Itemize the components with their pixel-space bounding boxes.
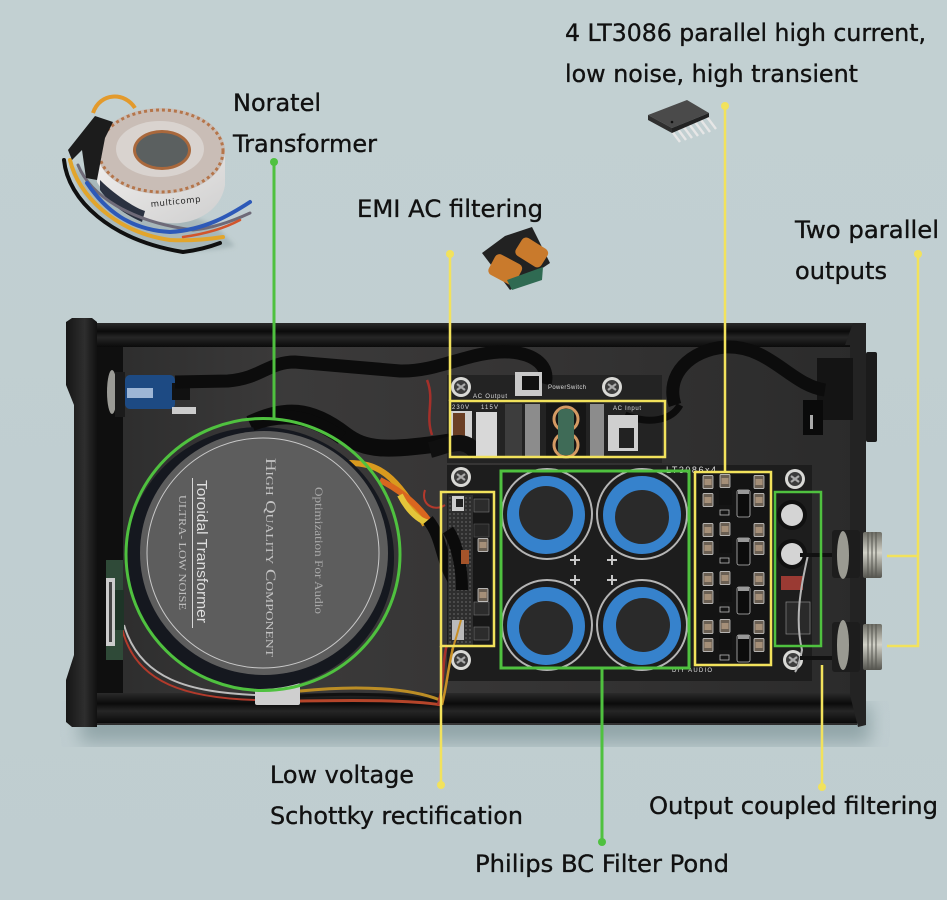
callout: LT3086 [695,102,771,665]
chassis shadow [80,705,870,743]
callout: EMI filter [446,250,665,457]
transformer lead bundle [68,116,113,180]
transformer hole [136,133,188,167]
transformer wires [64,160,250,252]
winding copper edge [99,110,223,192]
right side bump [866,352,877,442]
label: transformer: Transformer [232,130,377,158]
LT3086 regulator board [666,465,769,674]
callout: filter pond [501,471,689,846]
plus signs [570,555,617,585]
common mode choke [546,403,586,458]
cable over transformer [252,417,342,438]
screws [451,377,805,670]
icon: LT3086 chip [648,100,716,142]
callout: parallel outputs [887,250,922,646]
wire connector [255,683,300,705]
disc text: Optimization For Audio [312,487,326,614]
bottom rail [97,693,857,723]
chassis interior [97,323,857,725]
AC filter PCB [447,375,662,463]
indicator board [106,560,124,660]
capacitor bottom right [597,580,687,670]
LT3086 regulator board: LT3086x4 [666,465,716,475]
upper output connector [832,530,882,579]
output filter components [777,500,810,672]
label: rectification: Schottky rectification [270,802,523,830]
transformer soft shadow [70,165,235,251]
AC input wires [625,405,680,420]
callout: output filter box [775,492,821,646]
transformer winding [97,108,225,194]
disc heading: High Quality Component [262,458,278,657]
left shaded inner band [97,347,123,693]
right end cap [845,323,866,727]
label: outputs: Two parallel [794,216,939,244]
label: transformer [232,89,377,158]
red thin wire [427,380,432,435]
disc subheading: Toroidal Transformer [193,480,210,623]
rectifier board [448,495,491,650]
callout: rectification [437,492,494,789]
toroidal transformer [126,427,394,689]
transformer disc ring [147,438,379,668]
filter capacitors [502,469,687,670]
transformer label patch [100,180,145,222]
capacitor top left [502,469,592,559]
transformer body [97,150,225,223]
transformer outer wrap [126,427,394,689]
transformer hole rim [133,130,191,170]
callout: output filter leader [818,665,826,791]
label: outputs [794,216,939,285]
AC power socket [803,358,853,435]
transformer top lead [93,97,135,113]
AC filter section: PowerSwitch [548,385,586,391]
AC labels: AC Output [473,394,507,400]
label: filter pond: Philips BC Filter Pond [475,850,729,878]
power switch connector [515,372,542,396]
icon: EMI common mode choke [482,227,550,290]
transformer label: multicomp [150,195,201,210]
icon: toroidal transformer [64,97,250,252]
label: rectification [270,761,523,830]
power supply chassis photo [66,318,882,727]
transformer cap disc [140,431,388,675]
top rail [97,323,857,347]
AC input connector [608,415,638,451]
label: LT3086: low noise, high transient [565,60,858,88]
black cable top [175,352,546,384]
black cable right [673,347,825,405]
coloured wires [345,463,463,615]
callout: transformer [126,158,400,690]
left end cap [66,318,97,727]
label: EMI: EMI AC filtering [357,195,543,223]
label: output filtering: Output coupled filtering [649,792,938,820]
230V connector [451,411,472,439]
AC filter section: 230V [452,405,469,411]
label: LT3086 [565,19,926,88]
label: outputs: outputs [795,257,887,285]
transformer cable [250,413,450,448]
lower output connector [832,620,882,672]
disc tagline: ULTRA- LOW NOISE [176,495,188,610]
label: rectification: Low voltage [270,761,414,789]
main PCB [447,465,812,681]
label: transformer: Noratel [233,89,321,117]
disc rule [192,478,193,628]
power switch [107,370,196,417]
AC filter section [430,372,641,458]
bottom signal wires [122,625,455,705]
winding highlight [116,121,204,177]
capacitor top right [597,469,687,559]
AC filter section: 115V [481,405,498,411]
capacitor bottom left [502,580,592,670]
label: LT3086: 4 LT3086 parallel high current, [565,19,926,47]
LT3086 regulator board: DIY AUDIO [672,668,712,674]
filter blocks [505,404,522,456]
115V connector [476,412,497,457]
AC filter section: AC Input [613,406,641,412]
output wires [800,555,835,658]
black cable on connector [430,443,478,455]
